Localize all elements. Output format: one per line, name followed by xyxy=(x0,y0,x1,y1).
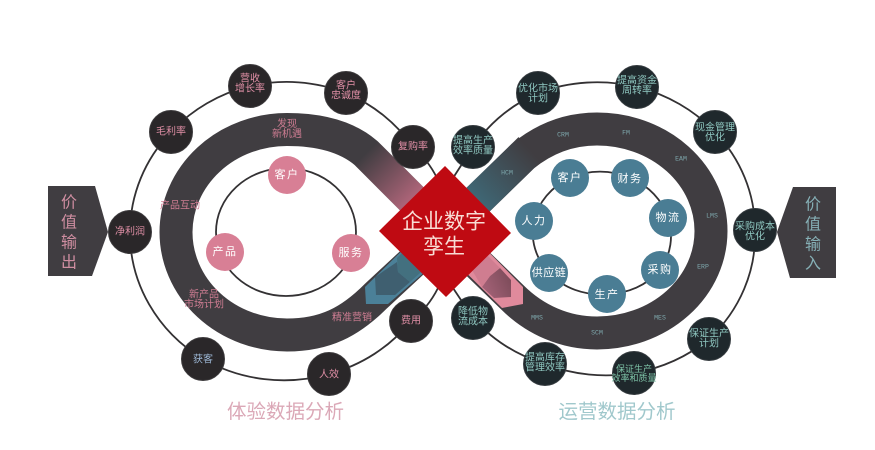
value output panel: 出 xyxy=(61,254,77,272)
node: repurchase rate: 复购率 xyxy=(398,140,428,152)
node: customer xyxy=(551,159,589,197)
ribbon: teal gradient segment xyxy=(460,149,530,217)
node: efficiency and quality: 保证生产 xyxy=(616,363,652,374)
ribbon labels: right: FM xyxy=(622,130,630,136)
node: customer acquisition xyxy=(182,338,224,380)
node: product xyxy=(206,233,244,271)
node: purchasing: 采购 xyxy=(648,262,672,276)
node: cash management: 优化 xyxy=(705,130,725,144)
node: inventory efficiency xyxy=(524,342,566,386)
node: production efficiency xyxy=(452,126,494,168)
ribbon labels: right: MES xyxy=(654,314,666,322)
ribbon: pink gradient segment xyxy=(366,153,430,217)
node: labor efficiency: 人效 xyxy=(319,368,339,380)
node: efficiency and quality: 效率和质量 xyxy=(611,372,657,383)
node: gross margin xyxy=(150,110,192,154)
ribbon labels: left: 市场计划 xyxy=(184,298,224,310)
value input panel: 入 xyxy=(805,256,821,272)
center diamond xyxy=(379,166,511,297)
value output panel: 价 xyxy=(61,194,77,212)
node: finance: 财务 xyxy=(618,171,642,185)
node: customer: 客户 xyxy=(274,167,300,181)
node: production efficiency: 效率质量 xyxy=(453,144,493,156)
node: market plan: 优化市场 xyxy=(518,82,558,94)
node: production xyxy=(588,275,626,313)
title: operations data analysis: 运营数据分析 xyxy=(558,401,676,423)
node: service xyxy=(332,234,370,272)
ribbon labels: right: MMS xyxy=(531,314,543,322)
node: revenue growth: 营收 xyxy=(240,72,260,84)
node: repurchase rate xyxy=(392,126,434,168)
node: gross margin: 毛利率 xyxy=(156,124,186,138)
ribbon: right loop xyxy=(445,129,711,333)
node: efficiency and quality xyxy=(611,352,657,394)
node: human resources: 人力 xyxy=(522,214,546,227)
node: production plan xyxy=(688,318,730,360)
node: finance xyxy=(611,159,649,197)
node: customer: 客户 xyxy=(558,170,582,184)
inner nodes: left xyxy=(206,156,370,272)
node: production efficiency: 提高生产 xyxy=(453,134,493,146)
node: production: 生产 xyxy=(594,287,620,301)
node: cash management: 现金管理 xyxy=(695,120,735,134)
node: product: 产品 xyxy=(212,244,238,258)
node: labor efficiency xyxy=(308,352,350,396)
node: human resources xyxy=(515,202,553,240)
ribbon labels: right: LMS xyxy=(706,212,718,220)
chevrons: pink xyxy=(445,228,523,308)
chevrons: teal xyxy=(365,228,450,304)
value output panel xyxy=(48,186,108,276)
inner ring: right xyxy=(533,172,671,294)
ribbon labels: left: 发现 xyxy=(277,117,297,130)
node: expense: 费用 xyxy=(401,314,421,326)
ribbon labels: right: SCM xyxy=(591,330,603,336)
node: purchase cost xyxy=(734,208,776,252)
node: expense xyxy=(390,300,432,342)
node: logistics cost xyxy=(452,296,494,340)
value output panel: 值 xyxy=(61,214,77,232)
node: customer loyalty: 客户 xyxy=(336,78,356,92)
node: customer xyxy=(268,156,306,194)
node: capital turnover: 提高资金 xyxy=(617,74,657,86)
center diamond: 孪生 xyxy=(423,236,465,258)
node: logistics cost: 降低物 xyxy=(458,304,488,318)
ribbon labels: right: HCM xyxy=(501,170,513,176)
node: production plan: 保证生产 xyxy=(689,326,729,340)
node: logistics: 物流 xyxy=(656,210,680,224)
node: inventory efficiency: 提高库存 xyxy=(525,350,565,364)
ribbon labels: left: 精准营销 xyxy=(332,310,372,324)
node: purchasing xyxy=(641,251,679,289)
node: customer acquisition: 获客 xyxy=(193,352,213,366)
node: production plan: 计划 xyxy=(699,336,719,350)
value input panel: 值 xyxy=(805,216,821,234)
node: purchase cost: 优化 xyxy=(745,230,765,242)
ribbon labels: right: EAM xyxy=(675,156,687,162)
outer nodes: right xyxy=(452,66,776,394)
outer nodes: left xyxy=(108,64,434,396)
ribbon labels: left xyxy=(160,117,372,324)
node: inventory efficiency: 管理效率 xyxy=(525,360,565,374)
ribbon labels: right: ERP xyxy=(697,264,709,270)
node: logistics cost: 流成本 xyxy=(458,314,488,328)
node: purchase cost: 采购成本 xyxy=(735,220,775,232)
ribbon: infinity loop xyxy=(176,129,711,335)
value input panel: 输 xyxy=(805,236,821,254)
node: cash management xyxy=(694,110,736,154)
node: supply chain: 供应链 xyxy=(532,265,566,279)
ribbon: left loop xyxy=(176,130,445,335)
node: capital turnover: 周转率 xyxy=(622,84,652,96)
center diamond: 企业数字 xyxy=(402,210,486,234)
node: net profit xyxy=(108,210,152,254)
ribbon labels: right: CRM xyxy=(557,132,569,138)
ribbon labels: right xyxy=(501,130,718,336)
node: market plan xyxy=(516,72,560,114)
node: logistics xyxy=(649,199,687,237)
outer ring: left xyxy=(130,82,438,380)
node: capital turnover xyxy=(616,66,658,108)
node: service: 服务 xyxy=(338,246,364,259)
value output panel: 输 xyxy=(61,234,77,252)
node: customer loyalty: 忠诚度 xyxy=(331,88,361,102)
inner nodes: right xyxy=(515,159,687,313)
node: market plan: 计划 xyxy=(528,92,548,104)
node: net profit: 净利润 xyxy=(115,224,145,238)
ribbon labels: left: 产品互动 xyxy=(160,198,200,212)
title: experience data analysis: 体验数据分析 xyxy=(227,401,344,423)
node: revenue growth xyxy=(228,64,272,108)
value input panel xyxy=(777,187,836,278)
outer ring: right xyxy=(453,82,755,375)
node: supply chain xyxy=(530,254,568,292)
value input panel: 价 xyxy=(805,196,821,214)
node: customer loyalty xyxy=(324,72,368,114)
node: revenue growth: 增长率 xyxy=(235,82,265,94)
inner ring: left xyxy=(216,168,356,296)
ribbon labels: left: 新产品 xyxy=(189,288,219,300)
ribbon labels: left: 新机遇 xyxy=(272,127,302,140)
